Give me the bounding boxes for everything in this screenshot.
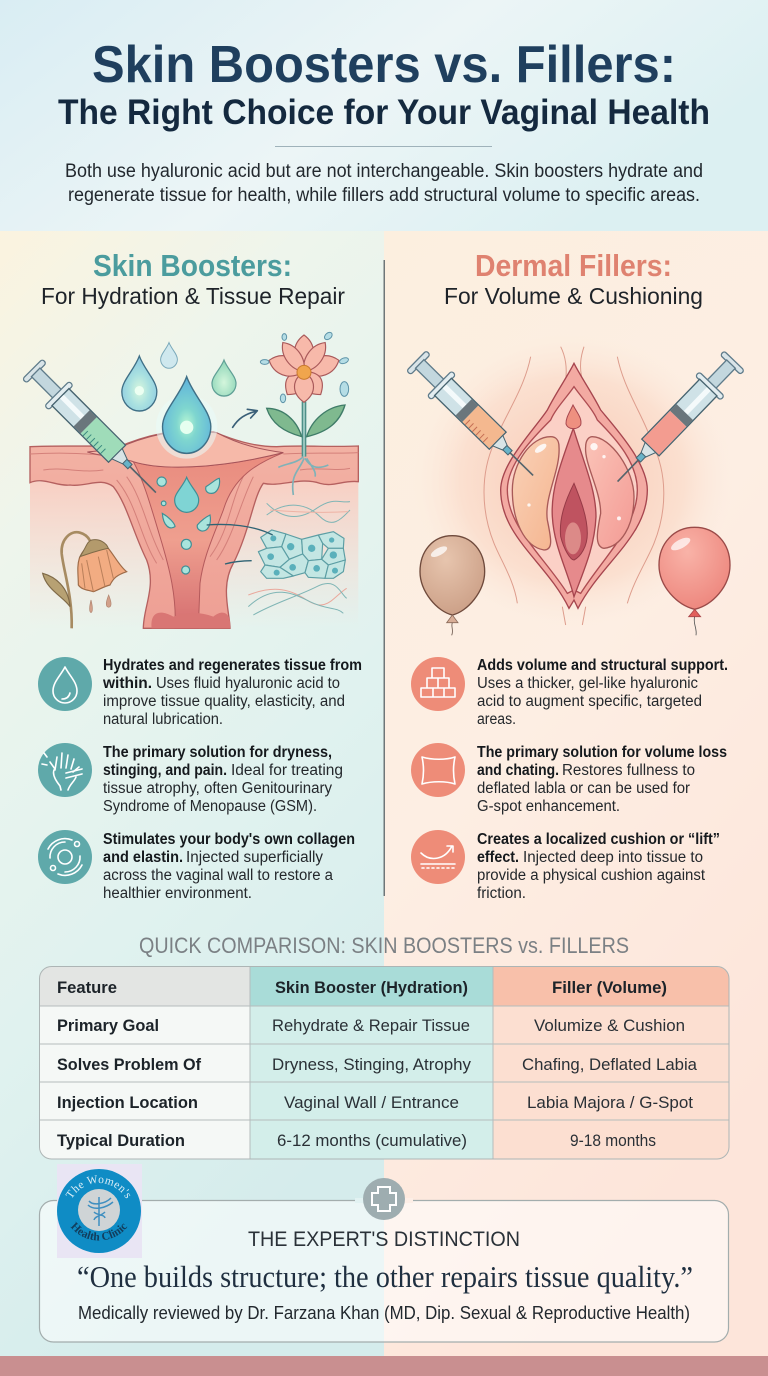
row: solves problem of: Chafing, Deflated Labia xyxy=(522,1055,698,1074)
row: typical duration: 9-18 months xyxy=(570,1131,656,1150)
row: injection location: Vaginal Wall / Entrance xyxy=(284,1093,459,1112)
benefit: hydrates: Hydrates and regenerates tissue from xyxy=(103,657,362,674)
benefit: volume loss: and chating. xyxy=(477,762,559,779)
title xyxy=(58,36,710,132)
table header xyxy=(57,978,667,997)
logo: The Women's Health Clinic xyxy=(57,1164,142,1258)
reviewer credit: Medically reviewed by Dr. Farzana Khan (MD, Dip. Sexual & Reproductive Health) xyxy=(78,1303,690,1323)
table header: Feature xyxy=(57,978,117,997)
row: solves problem of xyxy=(57,1055,698,1074)
intro text xyxy=(65,161,703,206)
drops inside tissue xyxy=(157,477,220,574)
right syringe xyxy=(605,349,747,494)
heading: dermal fillers xyxy=(444,248,703,309)
benefit: cushion: Injected deep into tissue to xyxy=(523,849,703,866)
collagen fibers xyxy=(248,501,350,615)
benefit: volume loss: Restores fullness to xyxy=(562,762,695,779)
heading: dermal fillers: For Volume & Cushioning xyxy=(444,283,703,309)
benefit: volume: Uses a thicker, gel-like hyaluronic xyxy=(477,675,698,692)
icon: pillow xyxy=(411,743,465,797)
left balloon xyxy=(420,536,485,635)
row: typical duration: Typical Duration xyxy=(57,1131,185,1150)
benefit: collagen: across the vaginal wall to restore a xyxy=(103,867,333,884)
icon: water drop xyxy=(38,657,92,711)
benefit: hydrates: Uses fluid hyaluronic acid to xyxy=(156,675,340,692)
icon: orbit rings xyxy=(38,830,92,884)
benefit: cushion: provide a physical cushion against xyxy=(477,867,706,884)
row: solves problem of: Dryness, Stinging, Atrophy xyxy=(272,1055,471,1074)
title: The Right Choice for Your Vaginal Health xyxy=(58,93,710,132)
row: primary goal: Volumize & Cushion xyxy=(534,1016,685,1035)
green drop xyxy=(212,360,236,396)
left filler pad xyxy=(512,437,559,550)
benefit: hydrates: within. xyxy=(102,675,152,692)
benefit: collagen xyxy=(38,830,355,902)
row: primary goal: Rehydrate & Repair Tissue xyxy=(272,1016,470,1035)
row: typical duration xyxy=(57,1131,656,1150)
syringe xyxy=(20,357,168,505)
heading: skin boosters: Skin Boosters: xyxy=(93,248,292,283)
benefit: cushion: friction. xyxy=(477,885,526,902)
illustration: skin booster tissue hydration xyxy=(20,331,358,628)
right balloon xyxy=(659,527,730,635)
benefit: cushion xyxy=(411,830,720,902)
benefit: cushion: Creates a localized cushion or “lift” xyxy=(477,831,720,848)
healthy flower xyxy=(260,331,349,495)
heading: skin boosters: For Hydration & Tissue Repair xyxy=(41,283,345,309)
benefit: hydrates: natural lubrication. xyxy=(103,711,223,728)
benefit: hydrates xyxy=(38,657,362,728)
intro text: Both use hyaluronic acid but are not interchangeable. Skin boosters hydrate and xyxy=(65,161,703,182)
intro text: regenerate tissue for health, while fillers add structural volume to specific areas. xyxy=(68,185,700,206)
tissue cross-section xyxy=(30,432,358,628)
row: primary goal xyxy=(57,1016,685,1035)
heading: skin boosters xyxy=(41,248,345,309)
comparison table xyxy=(39,966,729,1159)
logo: The Women's Health Clinic: The Women's xyxy=(65,1175,130,1198)
benefit: dryness: Syndrome of Menopause (GSM). xyxy=(103,798,317,815)
icon: hand xyxy=(38,743,92,797)
comparison heading: QUICK COMPARISON: SKIN BOOSTERS vs. FILLERS xyxy=(139,933,629,958)
panel: expert distinction xyxy=(40,1200,728,1342)
left syringe xyxy=(404,348,545,488)
icon: medical cross xyxy=(355,1178,413,1220)
illustration: dermal filler volume xyxy=(404,333,747,635)
benefit: dryness xyxy=(38,743,343,815)
row: solves problem of: Solves Problem Of xyxy=(57,1055,201,1074)
right filler pad xyxy=(586,437,634,548)
benefit: volume xyxy=(411,657,728,728)
benefit: hydrates: improve tissue quality, elasticity, and xyxy=(103,693,345,710)
heading: expert: THE EXPERT'S DISTINCTION xyxy=(248,1228,520,1251)
benefit: dryness: stinging, and pain. xyxy=(103,762,227,779)
table header: Filler (Volume) xyxy=(552,978,667,997)
icon: lift arrow xyxy=(411,830,465,884)
benefit: collagen: Injected superficially xyxy=(186,849,323,866)
benefit: cushion: effect. xyxy=(477,849,519,866)
arrow xyxy=(233,409,257,427)
benefit: volume: areas. xyxy=(477,711,516,728)
large drop xyxy=(163,377,211,453)
benefit: volume loss xyxy=(411,743,727,815)
background: header band xyxy=(0,0,768,231)
background: left panel xyxy=(0,231,384,1356)
row: injection location xyxy=(57,1093,693,1112)
wilted flower xyxy=(43,532,127,628)
row: injection location: Labia Majora / G-Spot xyxy=(527,1093,693,1112)
row: injection location: Injection Location xyxy=(57,1093,198,1112)
title: Skin Boosters vs. Fillers: xyxy=(92,36,676,94)
row: primary goal: Primary Goal xyxy=(57,1016,159,1035)
benefit: volume loss: G-spot enhancement. xyxy=(477,798,620,815)
tissue lid xyxy=(87,432,283,467)
medium drop xyxy=(122,356,157,411)
benefit: volume loss: deflated labla or can be used for xyxy=(477,780,690,797)
heading: dermal fillers: Dermal Fillers: xyxy=(475,248,672,283)
inner cavity xyxy=(133,453,283,628)
table header: Skin Booster (Hydration) xyxy=(275,978,468,997)
benefit: collagen: healthier environment. xyxy=(103,885,252,902)
benefit: collagen: Stimulates your body's own collagen xyxy=(103,831,355,848)
benefit: volume: acid to augment specific, targeted xyxy=(477,693,702,710)
central tissue xyxy=(552,428,596,597)
benefit: volume loss: The primary solution for volume loss xyxy=(477,744,727,761)
quote: “One builds structure; the other repairs tissue quality.” xyxy=(77,1259,693,1294)
benefit: dryness: The primary solution for dryness, xyxy=(103,744,332,761)
icon: stacked blocks xyxy=(411,657,465,711)
cell cluster xyxy=(258,530,345,578)
benefit: collagen: and elastin. xyxy=(103,849,183,866)
small drop xyxy=(161,343,177,368)
row: typical duration: 6-12 months (cumulative) xyxy=(277,1131,467,1150)
benefit: dryness: Ideal for treating xyxy=(231,762,343,779)
footer band xyxy=(0,1356,768,1376)
logo: The Women's Health Clinic: Health Clinic xyxy=(70,1222,128,1241)
benefit: dryness: tissue atrophy, often Genitourinary xyxy=(103,780,332,797)
background: right panel xyxy=(384,231,768,1356)
benefit: volume: Adds volume and structural support. xyxy=(477,657,728,674)
outer shape xyxy=(501,363,647,608)
